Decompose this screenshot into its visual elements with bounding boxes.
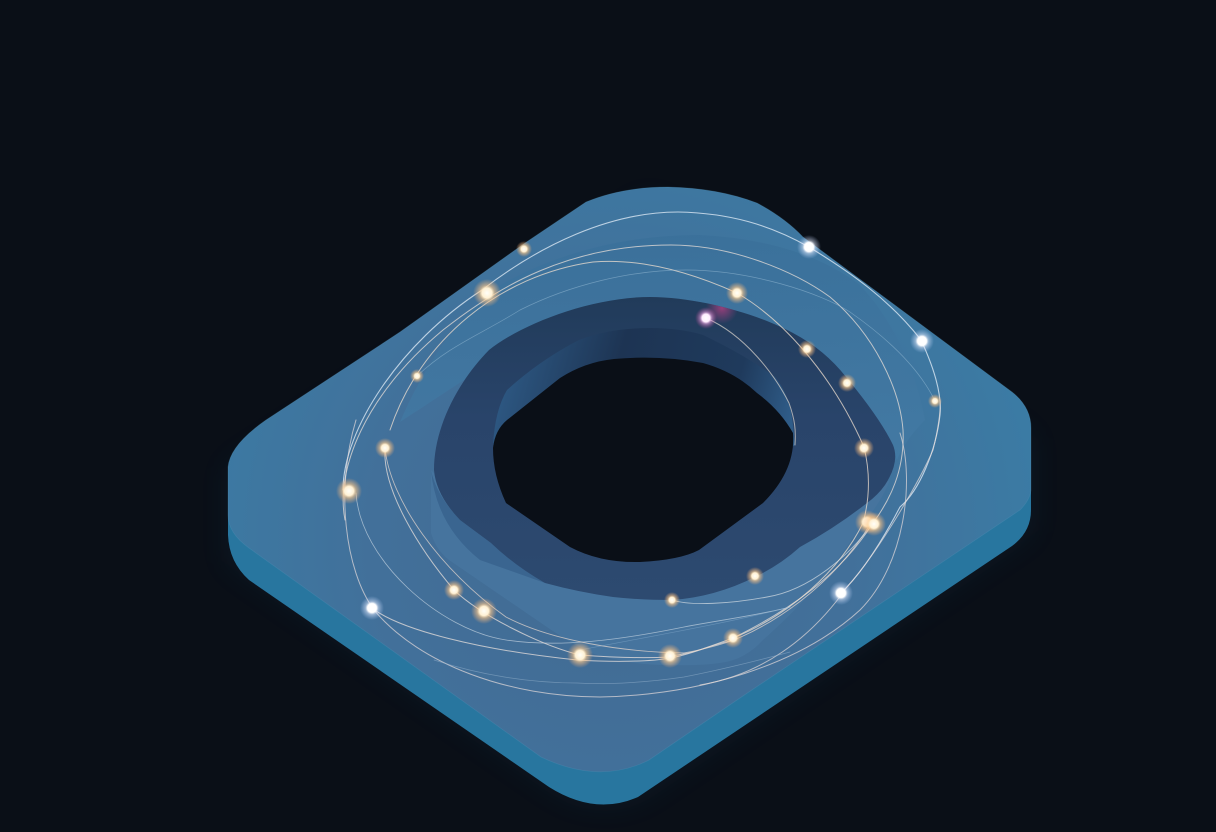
illustration: isometric platform with ring of lights xyxy=(228,186,1032,804)
platform top face xyxy=(228,187,1031,772)
platform glow xyxy=(230,200,1030,802)
light points xyxy=(336,235,942,668)
recess: dark ring xyxy=(434,297,895,600)
lower lit band around the recess xyxy=(431,470,890,665)
platform side wall xyxy=(228,450,1031,805)
central hole xyxy=(493,358,793,562)
wall crescent beside the dark ring xyxy=(431,470,545,583)
inner wall of hole xyxy=(493,328,795,480)
upper band of the top face xyxy=(400,235,925,460)
fairy light strings xyxy=(343,212,940,697)
